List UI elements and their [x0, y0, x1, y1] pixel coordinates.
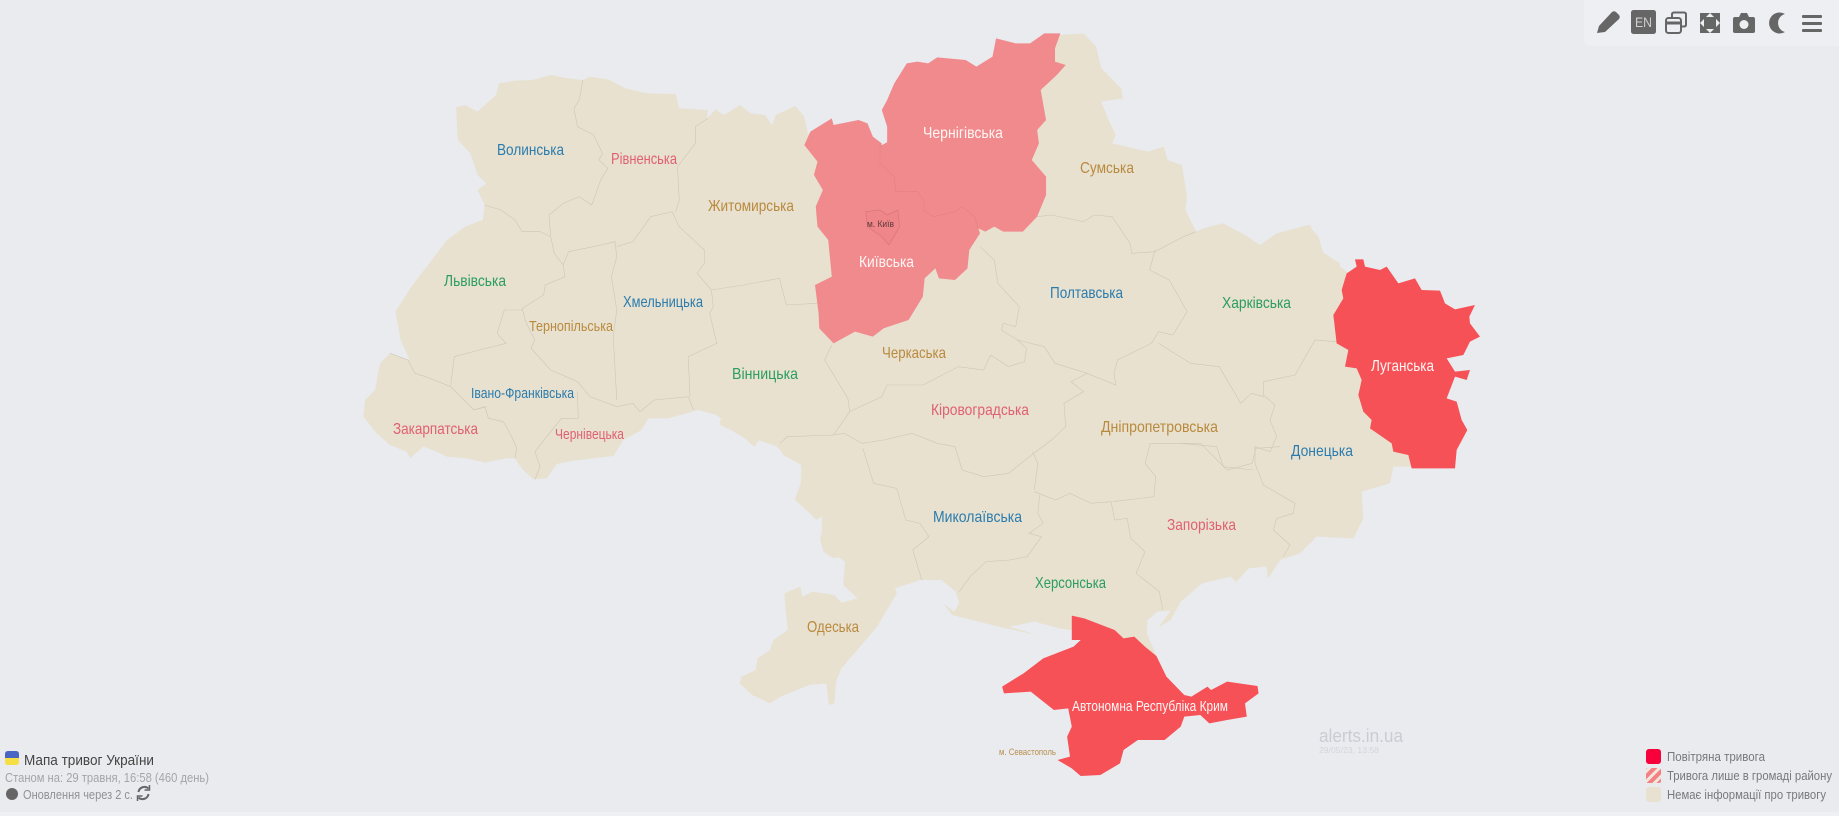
label: Rivne: Рівненська — [611, 151, 677, 168]
label: Sevastopol: м. Севастополь — [999, 747, 1056, 758]
label: Kirovohrad: Кіровоградська — [931, 402, 1029, 419]
icon: windows — [1666, 12, 1686, 33]
label: Crimea: Автономна Республіка Крим — [1072, 699, 1228, 715]
status dot — [6, 788, 18, 800]
oblast borders: east — [1180, 340, 1337, 557]
region: Crimea under alert — [1002, 616, 1259, 776]
label: Donetsk: Донецька — [1291, 443, 1353, 460]
label: Odesa: Одеська — [807, 619, 859, 636]
label: Ivano-Frankivsk: Івано-Франківська — [471, 386, 575, 402]
region: Luhansk under alert — [1333, 259, 1480, 468]
label: Kyiv city: м. Київ — [867, 219, 894, 230]
land: southern coast — [720, 420, 1280, 705]
icon: language EN: EN — [1635, 14, 1652, 30]
icon: Ukrainian flag — [5, 751, 19, 765]
icon: fullscreen — [1700, 13, 1720, 33]
icon: pencil — [1597, 11, 1620, 33]
toolbar panel — [1584, 0, 1839, 46]
label: Chernivtsi: Чернівецька — [555, 427, 625, 443]
map of Ukraine — [363, 33, 1480, 776]
icon: refresh — [138, 785, 150, 801]
Kyiv city — [866, 210, 900, 245]
land: south-west border — [363, 330, 840, 558]
label: Dnipropetrovsk: Дніпропетровська — [1101, 419, 1218, 436]
Chernihiv oblast — [880, 33, 1066, 232]
label: Lviv: Львівська — [444, 273, 506, 290]
label: Luhansk: Луганська — [1371, 358, 1434, 375]
watermark — [1319, 726, 1404, 755]
watermark date: 29/05/23, 13:58 — [1319, 745, 1379, 755]
label: Zaporizhzhia: Запорізька — [1167, 517, 1236, 534]
label: Mykolaiv: Миколаївська — [933, 509, 1022, 526]
oblast borders: south — [863, 443, 1280, 610]
label: Poltava: Полтавська — [1050, 285, 1123, 302]
region: Kyiv and Chernihiv under alert — [804, 33, 1066, 343]
icon: moon — [1769, 13, 1785, 33]
status block — [5, 751, 209, 802]
label: Cherkasy: Черкаська — [882, 345, 946, 362]
timestamp: Станом на: 29 травня, 16:58 (460 день) — [5, 770, 209, 785]
oblast borders: south-west — [473, 392, 578, 479]
update countdown: Оновлення через 2 с. — [23, 787, 133, 802]
icon: language EN — [1631, 10, 1656, 34]
legend swatch: no information — [1646, 787, 1661, 802]
legend swatch: partial alert — [1646, 768, 1661, 783]
label: Ternopil: Тернопільська — [529, 319, 614, 335]
label: Volyn: Волинська — [497, 142, 564, 159]
label: Khmelnytskyi: Хмельницька — [623, 294, 703, 311]
legend text: air alert: Повітряна тривога — [1667, 750, 1765, 764]
label: Vinnytsia: Вінницька — [732, 366, 798, 383]
label: Zakarpattia: Закарпатська — [393, 421, 478, 438]
label: Sumy: Сумська — [1080, 160, 1134, 177]
oblast borders: west — [390, 80, 817, 412]
title: Мапа тривог України — [24, 752, 154, 769]
land: north-eastern and central oblasts — [834, 33, 1340, 490]
label: Kyiv oblast: Київська — [859, 254, 914, 271]
watermark site name: alerts.in.ua — [1319, 726, 1404, 746]
label: Kharkiv: Харківська — [1222, 295, 1291, 312]
land: western oblasts — [390, 75, 876, 403]
land: eastern oblasts — [1180, 223, 1413, 578]
Kyiv oblast — [804, 118, 980, 343]
label: Zhytomyr: Житомирська — [708, 198, 794, 215]
label: Kherson: Херсонська — [1035, 575, 1106, 592]
oblast labels — [393, 125, 1434, 758]
legend text: no information: Немає інформації про тривогу — [1667, 788, 1827, 802]
oblast borders: centre and east — [780, 215, 1264, 477]
legend swatch: air alert — [1646, 749, 1661, 764]
toolbar background — [1584, 0, 1839, 46]
label: Chernihiv: Чернігівська — [923, 125, 1003, 142]
icon: camera — [1733, 13, 1755, 33]
Kyiv / Chernihiv border — [880, 143, 978, 228]
legend — [1646, 749, 1833, 802]
icon: menu — [1802, 15, 1822, 32]
